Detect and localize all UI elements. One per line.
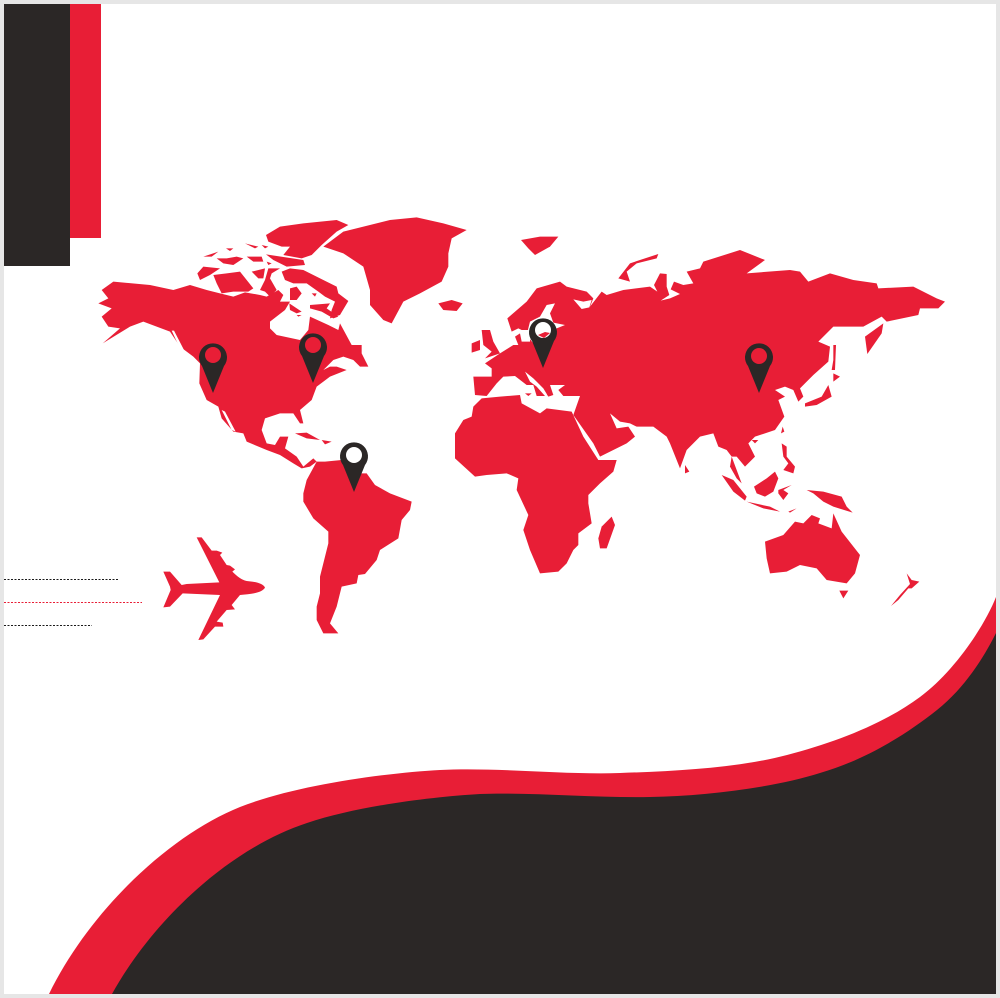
ireland bbox=[472, 340, 480, 353]
pin: eastern north america bbox=[299, 333, 327, 383]
japan and sakhalin bbox=[805, 345, 840, 407]
australia bbox=[765, 513, 860, 583]
south america bbox=[303, 460, 412, 633]
vancouver strait bbox=[172, 331, 184, 350]
white sea bbox=[573, 299, 592, 309]
speed line: bottom black bbox=[4, 624, 92, 626]
pin: south america bbox=[340, 442, 368, 492]
novaya zemlya bbox=[618, 254, 658, 282]
speed line: middle red bbox=[4, 602, 142, 604]
baja california gulf bbox=[222, 410, 236, 432]
africa bbox=[455, 395, 617, 573]
new guinea bbox=[807, 490, 853, 513]
north america bbox=[98, 282, 368, 468]
malay peninsula bbox=[730, 457, 742, 483]
red bottom wave bbox=[49, 597, 996, 994]
pin: western north america bbox=[199, 343, 227, 393]
mediterranean islands bbox=[525, 393, 551, 396]
kamchatka bbox=[865, 323, 883, 354]
new zealand bbox=[891, 573, 919, 606]
icon: airplane bbox=[163, 537, 265, 640]
southeast asian islands bbox=[722, 443, 797, 513]
eurasia bbox=[473, 250, 945, 468]
svalbard bbox=[521, 237, 558, 255]
top-left red bar bbox=[70, 4, 101, 238]
madagascar bbox=[598, 517, 615, 548]
great britain bbox=[482, 330, 500, 358]
greenland bbox=[323, 217, 467, 323]
pin: europe bbox=[529, 318, 557, 368]
canadian arctic islands bbox=[197, 220, 348, 318]
south asian and east asian islands bbox=[685, 427, 784, 473]
world map bbox=[98, 217, 945, 633]
baltic sea bbox=[527, 303, 565, 343]
dark bottom wave bbox=[112, 633, 996, 994]
old world landmasses bbox=[455, 237, 945, 606]
americas and north atlantic landmasses bbox=[98, 217, 467, 633]
top-left dark bar bbox=[4, 4, 70, 266]
speed line: top black bbox=[4, 578, 119, 580]
caribbean islands bbox=[295, 433, 332, 444]
iceland bbox=[438, 300, 463, 311]
tasmania bbox=[839, 591, 848, 598]
pin: asia bbox=[745, 343, 773, 393]
